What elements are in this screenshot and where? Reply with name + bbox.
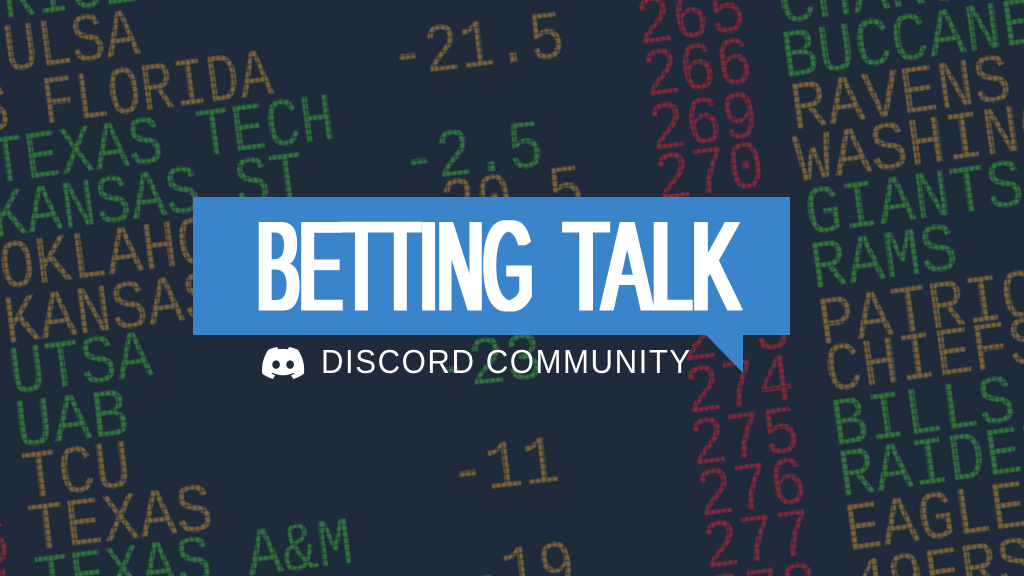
betting board: red rotation numbers: 266 [638, 24, 758, 118]
betting board: red rotation numbers: 275 [685, 393, 805, 487]
betting board: red rotation numbers: 269 [644, 78, 764, 172]
betting board: red rotation numbers: 273 [675, 289, 795, 383]
icon: discord logo [262, 347, 304, 379]
speech bubble banner [193, 197, 790, 373]
betting board: left team column: KANSAS ST [0, 244, 332, 365]
betting board: point spreads column: -23 [427, 319, 547, 411]
betting board: right team column: GIANTS [800, 146, 1024, 256]
betting board: red rotation numbers: 276 [692, 444, 812, 538]
betting board: point spreads column: -21.5 [385, 0, 569, 99]
betting board: left team column: UTSA [4, 318, 158, 415]
betting board: point spreads column [385, 0, 589, 576]
betting board: left team column: OKLAHOMA [0, 194, 290, 310]
betting board: right team column: RAVENS [785, 41, 1016, 151]
betting board: left team column: UAB [10, 377, 133, 469]
betting board: left team column [0, 0, 358, 576]
betting board: left team column: TCU [18, 427, 136, 520]
subtitle: DISCORD COMMUNITY [321, 343, 690, 380]
betting board: right team column: RAMS [805, 211, 963, 310]
betting board: red rotation numbers: 270 [650, 128, 770, 222]
betting board: point spreads column: -11 [444, 423, 564, 515]
title: BETTING [257, 195, 533, 337]
betting board: left team column: TEXAS [24, 471, 218, 572]
title: TALK [564, 195, 740, 337]
betting board: right team column: BILLS [826, 362, 1020, 467]
betting board: right team column [773, 0, 1024, 576]
betting board: point spreads column: -2.5 [396, 108, 548, 203]
betting board: red rotation numbers: 274 [680, 341, 800, 435]
betting board: point spreads column: -20.5 [401, 152, 589, 252]
